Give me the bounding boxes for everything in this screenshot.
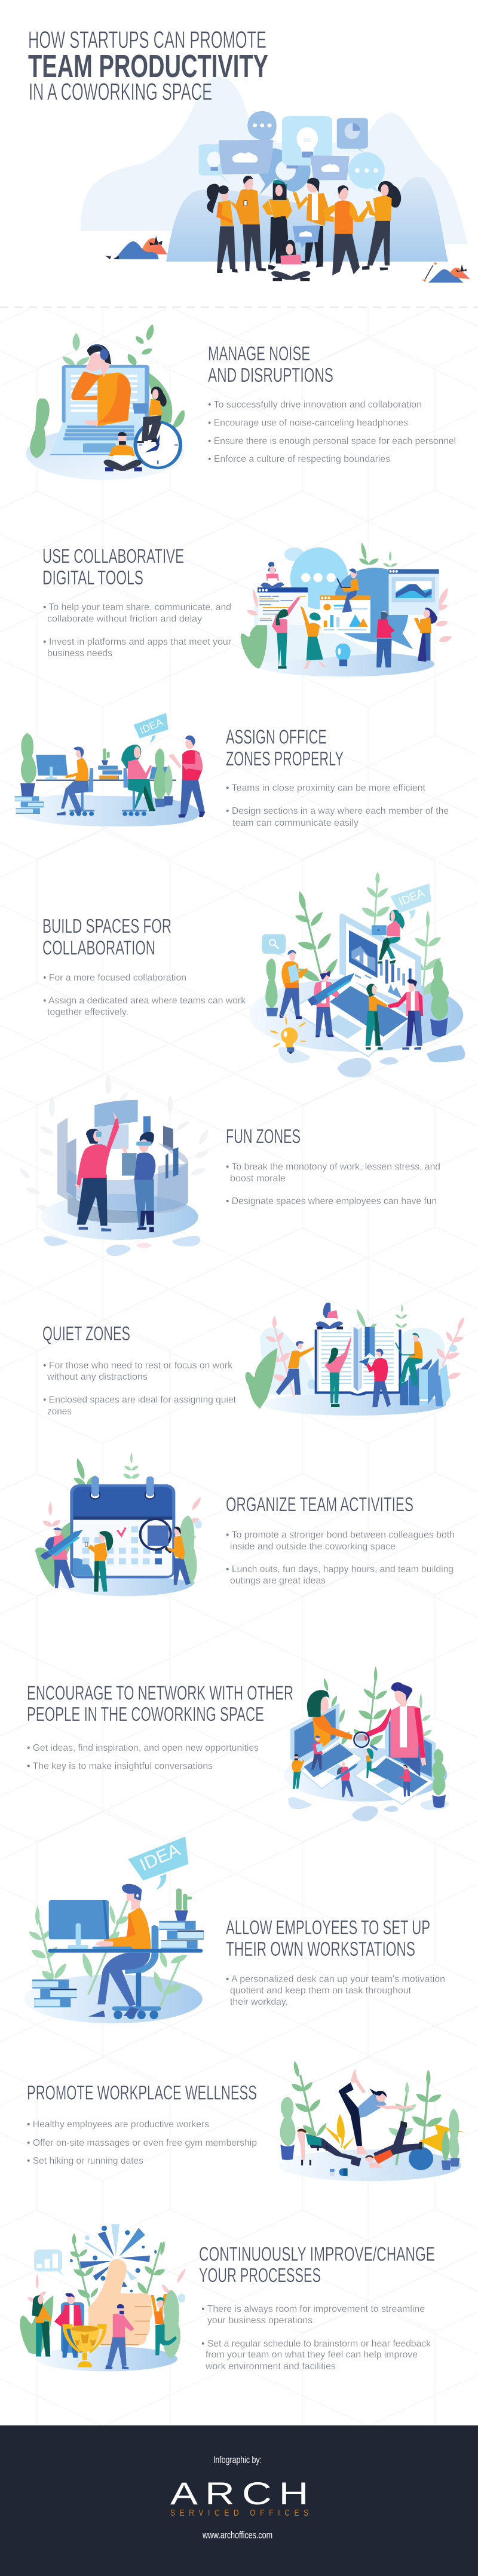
bullet list: • To break the monotony of work, lessen stress, and	[226, 1162, 440, 1172]
person seated on top of book	[315, 1303, 343, 1330]
heading	[199, 2243, 435, 2286]
illustration: giant book	[246, 1303, 465, 1416]
mini person: bearded	[292, 1754, 304, 1789]
bullet list: • For those who need to rest or focus on work	[43, 1361, 232, 1371]
heading: PROMOTE WORKPLACE WELLNESS	[27, 2082, 257, 2103]
person: plank right	[365, 2121, 422, 2168]
desk	[36, 780, 176, 781]
bullet list: • The key is to make insightful conversations	[27, 1762, 213, 1771]
section: assign office zones properly	[14, 713, 449, 828]
person with pencil	[40, 1527, 83, 1588]
person: woman in orange	[414, 608, 437, 661]
person: teal skirt woman	[301, 606, 326, 669]
bullet list: • Invest in platforms and apps that meet your	[43, 637, 231, 647]
person: woman with long dark hair	[362, 181, 401, 271]
person with ponytail	[85, 1531, 113, 1592]
icon: background mountains	[81, 77, 468, 244]
title	[28, 27, 268, 105]
idea bubble shape	[390, 883, 431, 920]
person: woman with ponytail	[207, 184, 255, 273]
bullet list: • Healthy employees are productive workers	[27, 2119, 209, 2130]
bullet list: • Designate spaces where employees can have fun	[226, 1196, 437, 1206]
pink and green plants	[246, 1304, 465, 1408]
heading: YOUR PROCESSES	[199, 2264, 321, 2286]
heading: QUIET ZONES	[42, 1322, 130, 1344]
person: man in pink with beard	[376, 611, 395, 667]
mini person: with pencil	[335, 1762, 358, 1797]
thumbs up	[88, 2259, 152, 2345]
heading	[226, 1916, 430, 1960]
heading	[42, 545, 184, 589]
person with paper plane	[358, 1349, 391, 1407]
heading: MANAGE NOISE	[208, 342, 310, 365]
person seated top	[261, 562, 284, 589]
large person: man in pink	[364, 1682, 426, 1776]
chair	[112, 1925, 161, 2019]
person: man in orange holding phone	[235, 176, 266, 271]
title: TEAM PRODUCTIVITY	[28, 48, 268, 84]
idea bubble text: IDEA	[397, 887, 427, 909]
laptop	[290, 914, 421, 1056]
person: woman jumping	[151, 2294, 177, 2356]
person standing	[168, 736, 205, 817]
bullet list: • Ensure there is enough personal space for each personnel	[208, 436, 456, 446]
large person: woman in orange	[307, 1690, 353, 1747]
icon: left rocks	[105, 236, 167, 259]
calendar body	[70, 1477, 175, 1578]
bullet list: their workday.	[230, 1997, 288, 2007]
section: manage noise and disruptions	[26, 324, 456, 480]
plant and pot	[432, 1749, 446, 1808]
potted plants right	[442, 2109, 459, 2170]
title: HOW STARTUPS CAN PROMOTE	[28, 27, 266, 53]
heading	[42, 915, 171, 958]
desk	[48, 1947, 203, 1953]
bullet list: from your team on what they feel can help improve	[206, 2350, 418, 2360]
bullet list: • To promote a stronger bond between colleagues both	[226, 1530, 455, 1540]
plant and books left	[14, 733, 44, 814]
heading	[226, 725, 344, 770]
person: push-up left	[297, 2128, 361, 2167]
bullet list: • Assign a dedicated area where teams can work	[43, 996, 246, 1006]
plants	[241, 542, 454, 669]
person: woman in orange handshake	[366, 984, 387, 1050]
bullet list: quotient and keep them on task throughout	[230, 1986, 412, 1996]
logo subtitle: SERVICED OFFICES	[170, 2508, 308, 2517]
title: IN A COWORKING SPACE	[29, 79, 212, 105]
illustration: virtual reality	[18, 1074, 210, 1256]
bullet list: • Get ideas, find inspiration, and open new opportunities	[27, 1743, 259, 1753]
person at monitor	[57, 747, 94, 816]
person: man handshake	[387, 979, 423, 1050]
section: build spaces for collaboration	[42, 872, 465, 1077]
bullet list: • To help your team share, communicate, and	[43, 602, 231, 612]
bullet list: outings are great ideas	[230, 1576, 326, 1586]
person: man in bright orange	[323, 185, 370, 275]
blobs	[278, 1045, 465, 1077]
section: organize team activities	[35, 1453, 455, 1596]
website: www.archoffices.com	[202, 2529, 272, 2541]
person reaching up	[324, 1337, 351, 1407]
icon: magnifying glass handshake	[354, 1732, 378, 1751]
section: use collaborative digital tools	[42, 542, 454, 676]
bullet list	[226, 783, 449, 828]
section: allow employees to set up their own workstations	[24, 1836, 445, 2023]
section: encourage to network	[27, 1667, 449, 1821]
icon: trophy	[63, 2324, 107, 2367]
footer band	[0, 2425, 478, 2576]
clock	[136, 422, 180, 468]
heading: DIGITAL TOOLS	[42, 566, 143, 589]
plants	[27, 1900, 189, 2007]
person: dancer yoga pose	[338, 2069, 415, 2154]
icon: water bottle and jar	[330, 2168, 348, 2176]
stacked books right	[400, 1358, 451, 1406]
mini person: pink by laptop	[399, 1765, 411, 1797]
person: man with tablet	[54, 2293, 84, 2358]
mini person: with book	[311, 1735, 323, 1770]
plants	[290, 2060, 465, 2165]
speech bubbles	[199, 111, 385, 195]
bullet list	[208, 400, 456, 464]
open book	[315, 1327, 402, 1396]
bullet list: • Lunch outs, fun days, happy hours, and team building	[226, 1564, 454, 1575]
idea bubble text: IDEA	[138, 716, 165, 736]
window: charts	[320, 595, 370, 633]
bullet list: team can communicate easily	[232, 818, 358, 828]
bullet list: • Design sections in a way where each member of the	[226, 806, 449, 816]
heading	[27, 1681, 293, 1725]
illustration: fitness workers	[278, 2060, 465, 2181]
illustration: teamwork around laptop	[249, 872, 465, 1077]
person: woman handshake	[32, 2295, 52, 2357]
illustration: personal desk	[24, 1836, 204, 2023]
person: woman in blue	[121, 1132, 155, 1232]
bullet list	[27, 2119, 257, 2166]
bullet list	[27, 1743, 259, 1771]
section: quiet zones	[42, 1303, 465, 1417]
person: headset woman	[121, 745, 155, 816]
bullet list: • Enclosed spaces are ideal for assigning quiet	[43, 1395, 237, 1405]
icon: magnifying glass	[140, 1519, 172, 1554]
plants	[35, 1453, 203, 1587]
bullet list: • Encourage use of noise-canceling headphones	[208, 418, 408, 428]
starburst	[70, 2224, 157, 2293]
plants	[20, 2234, 187, 2359]
person: man in pink	[75, 1111, 119, 1232]
bullet list: • Enforce a culture of respecting boundaries	[208, 454, 390, 464]
person seated on clock	[133, 387, 167, 443]
icon: right rocks	[422, 262, 470, 283]
curved screens	[57, 1100, 188, 1223]
person with pencil	[308, 970, 354, 1037]
window: text document	[258, 587, 308, 625]
mini person: jumping	[363, 1747, 378, 1778]
illustration: calendar	[35, 1453, 203, 1596]
bullet list	[201, 2304, 431, 2372]
illustration: thumbs up and trophy	[20, 2224, 187, 2372]
plant right	[179, 1515, 197, 1585]
bullet list: together effectively.	[47, 1007, 128, 1017]
icon: foreground mountains	[166, 177, 448, 262]
bullet list: • To successfully drive innovation and collaboration	[208, 400, 422, 410]
person seated with laptop	[396, 1333, 423, 1385]
idea bubble shape	[128, 1836, 188, 1889]
hero illustration: team with speech bubbles	[81, 77, 470, 283]
plants	[294, 872, 443, 997]
bullet list	[43, 1361, 237, 1417]
person with headphones	[71, 344, 131, 426]
plant and pot right	[430, 959, 449, 1037]
heading: AND DISRUPTIONS	[208, 364, 333, 386]
bullet list: • Set a regular schedule to brainstorm or hear feedback	[201, 2339, 431, 2349]
bullet list	[43, 602, 231, 658]
illustration: laptop with headphone worker and clock	[26, 324, 185, 480]
person: woman with teal hat	[262, 180, 292, 270]
heading	[208, 342, 333, 386]
icon: search bubble	[262, 934, 287, 957]
heading: PEOPLE IN THE COWORKING SPACE	[27, 1703, 264, 1725]
heading: ZONES PROPERLY	[226, 748, 344, 770]
illustration: networking with laptops	[284, 1667, 449, 1821]
icon: light bulb	[335, 644, 351, 666]
bullet list: business needs	[47, 648, 112, 658]
bullet list: • Offer on-site massages or even free gym membership	[27, 2138, 257, 2148]
bullet list	[226, 1530, 455, 1586]
monitor	[49, 1900, 109, 1949]
bullet list	[226, 1974, 445, 2007]
heading: ASSIGN OFFICE	[226, 725, 327, 748]
heading: ENCOURAGE TO NETWORK WITH OTHER	[27, 1681, 293, 1704]
person reaching left	[276, 1340, 314, 1395]
icon: exercise ball	[409, 2147, 433, 2170]
section: continuously improve	[20, 2224, 435, 2372]
heading: FUN ZONES	[226, 1125, 301, 1147]
illustration: office desks	[14, 713, 205, 826]
icon: light bulb	[269, 1016, 307, 1054]
section: promote workplace wellness	[27, 2060, 465, 2181]
person seated with beard	[103, 432, 142, 471]
big speech bubbles	[284, 547, 413, 649]
books left	[32, 1980, 77, 2007]
credit text: Infographic by:	[213, 2454, 262, 2465]
person: seated man with laptop	[337, 568, 359, 612]
cactus on books	[98, 748, 122, 780]
ghost leaves	[18, 1074, 210, 1213]
bullet list: inside and outside the coworking space	[230, 1542, 396, 1552]
bullet list	[226, 1162, 440, 1206]
heading: COLLABORATION	[42, 937, 155, 958]
bullet list: zones	[47, 1407, 72, 1417]
potted plant left	[280, 2097, 296, 2160]
bullet list: collaborate without friction and delay	[47, 614, 202, 624]
person at desk	[88, 1884, 151, 2017]
bullet list: • Set hiking or running dates	[27, 2156, 143, 2166]
small speech bubble with cloud	[293, 225, 320, 248]
bullet list: • There is always room for improvement to streamline	[201, 2304, 425, 2314]
bullet list: • For a more focused collaboration	[43, 973, 186, 983]
bullet list: your business operations	[207, 2315, 312, 2326]
bullet list: • A personalized desk can up your team's motivation	[226, 1974, 445, 1984]
laptop on desk	[149, 767, 169, 779]
blobs	[44, 1236, 200, 1256]
heading: BUILD SPACES FOR	[42, 915, 171, 937]
plants right	[154, 748, 173, 807]
idea bubble text: IDEA	[137, 1840, 183, 1875]
laptop	[50, 365, 158, 455]
bullet list: • Teams in close proximity can be more efficient	[226, 783, 426, 794]
person: man in pink with beard	[105, 2304, 134, 2369]
plants	[30, 324, 185, 458]
person with books	[279, 950, 308, 1019]
plants	[323, 1667, 433, 1748]
bullet list: boost morale	[230, 1174, 286, 1184]
illustration: digital tools	[241, 542, 454, 676]
person: woman seated on laptop	[372, 909, 405, 964]
idea bubble shape	[133, 713, 168, 743]
blobs	[288, 1797, 449, 1821]
person with headset	[167, 1527, 191, 1585]
heading: USE COLLABORATIVE	[42, 545, 184, 567]
icon: chart bubble	[34, 2250, 65, 2277]
books right with cactus	[159, 1888, 204, 1949]
plant and pot left	[265, 958, 278, 1016]
monitor	[36, 755, 68, 780]
section: fun zones	[18, 1074, 440, 1256]
bullet list: work environment and facilities	[205, 2361, 336, 2372]
person: man in orange jacket	[293, 178, 328, 268]
bullet list	[43, 973, 246, 1017]
person: pink top woman	[272, 596, 301, 669]
bullet list: without any distractions	[47, 1372, 148, 1382]
laptops	[290, 1703, 436, 1805]
window: area chart	[389, 569, 439, 615]
person: woman seated with laptop	[271, 240, 310, 281]
logo: ARCH: ARCH	[170, 2476, 308, 2511]
